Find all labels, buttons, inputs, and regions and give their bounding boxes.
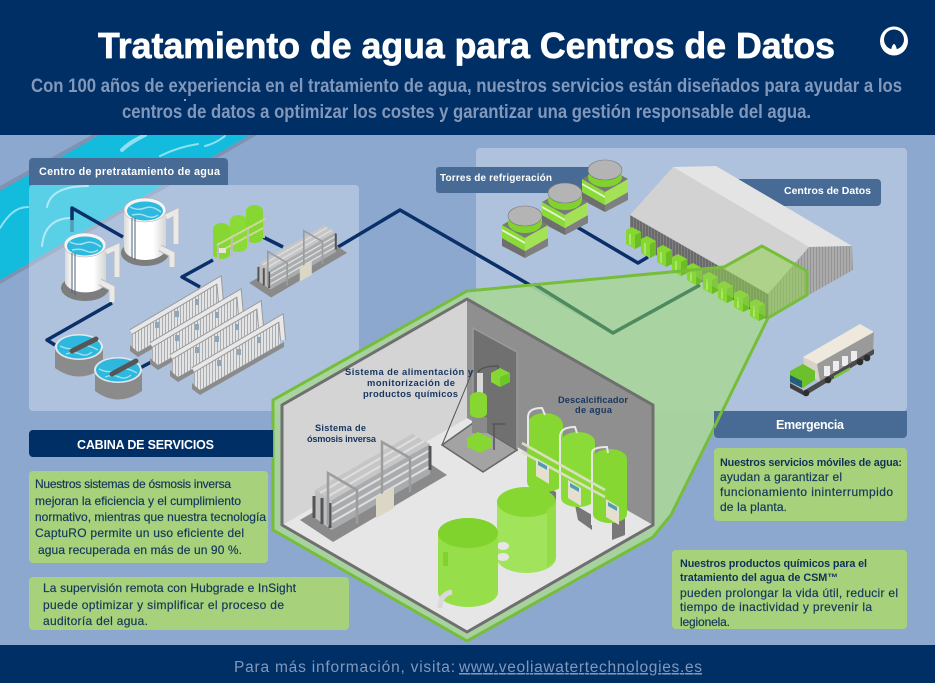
icon: large green tanks bbox=[438, 487, 556, 608]
label: reverse osmosis: ósmosis inversa bbox=[307, 434, 377, 444]
text box: chemical products: tratamiento del agua de CSM™ bbox=[680, 572, 838, 584]
text box: mobile services: Nuestros servicios móviles de agua: bbox=[720, 457, 902, 469]
label: chemical system: monitorización de bbox=[367, 377, 455, 388]
text box: mobile services: funcionamiento ininterrumpido bbox=[720, 485, 893, 499]
pipe seen through the beam bbox=[534, 284, 700, 333]
text box: reverse osmosis: agua recuperada en más de un 90 %. bbox=[38, 543, 242, 557]
text box: reverse osmosis bbox=[29, 471, 268, 563]
label: chemical system: productos químicos bbox=[363, 388, 458, 399]
icon: chemical dosing stand bbox=[442, 328, 517, 472]
heading: service cabin bar: CABINA DE SERVICIOS bbox=[77, 438, 214, 452]
label: reverse osmosis bbox=[307, 423, 377, 444]
icon: clarifier 2 bbox=[94, 357, 142, 400]
text box: chemical products: Nuestros productos químicos para el bbox=[680, 558, 867, 570]
subtitle bbox=[31, 76, 902, 123]
header band bbox=[0, 0, 935, 135]
beam edge over the emergency bar bbox=[714, 411, 722, 428]
text box: remote supervision: auditoría del agua. bbox=[43, 614, 148, 628]
icon: clarifier 1 bbox=[55, 334, 103, 376]
panel heading: pretreatment bbox=[29, 158, 228, 185]
text box: remote supervision: La supervisión remota con Hubgrade e InSight bbox=[43, 581, 297, 595]
text box: mobile services: de la planta. bbox=[720, 500, 787, 514]
text box: chemical products bbox=[672, 550, 907, 629]
highlight beam fill bbox=[273, 267, 768, 641]
heading: service cabin bar bbox=[29, 430, 273, 457]
subtitle: centros de datos a optimizar los costes y garantizar una gestión responsable del agua. bbox=[122, 102, 811, 123]
label: reverse osmosis: Sistema de bbox=[315, 423, 366, 433]
highlight over the building bbox=[686, 246, 807, 318]
footer band: www.veoliawatertechnologies.es bbox=[458, 659, 702, 676]
icon: reverse osmosis unit (pretreatment) bbox=[249, 225, 347, 298]
icon: truck bbox=[790, 324, 874, 396]
text box: reverse osmosis: mejoran la eficiencia y el cumplimiento bbox=[35, 494, 241, 508]
text box: chemical products: legionela. bbox=[680, 615, 730, 629]
icon: data centre building bbox=[626, 166, 853, 321]
icon: softener vessels bbox=[522, 408, 627, 540]
icon: small softener vessels bbox=[213, 205, 265, 265]
beam outline bbox=[273, 246, 807, 641]
text box: remote supervision: puede optimizar y simplificar el proceso de bbox=[43, 598, 284, 612]
heading: emergency bbox=[714, 411, 907, 438]
label: softener: Descalcificador bbox=[558, 395, 628, 405]
icon: storage tank 1 bbox=[61, 233, 117, 302]
label: chemical system bbox=[345, 366, 474, 399]
icon: logo bbox=[880, 26, 908, 56]
icon: cooling towers bbox=[502, 160, 628, 258]
text box: reverse osmosis: Nuestros sistemas de ósmosis inversa bbox=[35, 477, 231, 491]
text box: mobile services: ayudan a garantizar el bbox=[720, 470, 842, 484]
panel: pretreatment centre bbox=[29, 158, 359, 411]
room walls and floor bbox=[282, 299, 653, 632]
heading: cooling towers bbox=[436, 167, 596, 193]
footer band: Para más información, visita: bbox=[234, 659, 455, 676]
label: chemical system: Sistema de alimentación y bbox=[345, 366, 474, 377]
pipes bbox=[47, 208, 700, 368]
title: Tratamiento de agua para Centros de Datos bbox=[98, 25, 835, 66]
text box: chemical products: pueden prolongar la vida útil, reducir el bbox=[680, 586, 898, 600]
text box: reverse osmosis: normativo, mientras que nuestra tecnología bbox=[35, 510, 266, 524]
heading: cooling towers: Torres de refrigeración bbox=[440, 173, 552, 184]
panel heading: pretreatment: Centro de pretratamiento de agua bbox=[39, 166, 221, 178]
icon: reverse osmosis unit bbox=[300, 434, 447, 542]
panel: data centres area bbox=[476, 148, 907, 411]
service cabin room bbox=[282, 299, 653, 632]
heading: emergency: Emergencia bbox=[776, 418, 845, 432]
icon: membrane racks bbox=[130, 280, 284, 395]
icon: storage tank 2 bbox=[121, 198, 176, 267]
river bbox=[0, 135, 257, 284]
footer band bbox=[0, 645, 935, 683]
label: softener bbox=[558, 395, 628, 415]
text box: remote supervision bbox=[29, 577, 349, 630]
text box: reverse osmosis: CaptuRO permite un uso eficiente del bbox=[35, 526, 244, 540]
label: softener: de agua bbox=[575, 405, 613, 415]
heading: data centres: Centros de Datos bbox=[784, 185, 871, 197]
text box: chemical products: tiempo de inactividad y prevenir la bbox=[680, 600, 872, 614]
text box: mobile services bbox=[714, 448, 907, 521]
heading: data centres bbox=[737, 179, 881, 206]
